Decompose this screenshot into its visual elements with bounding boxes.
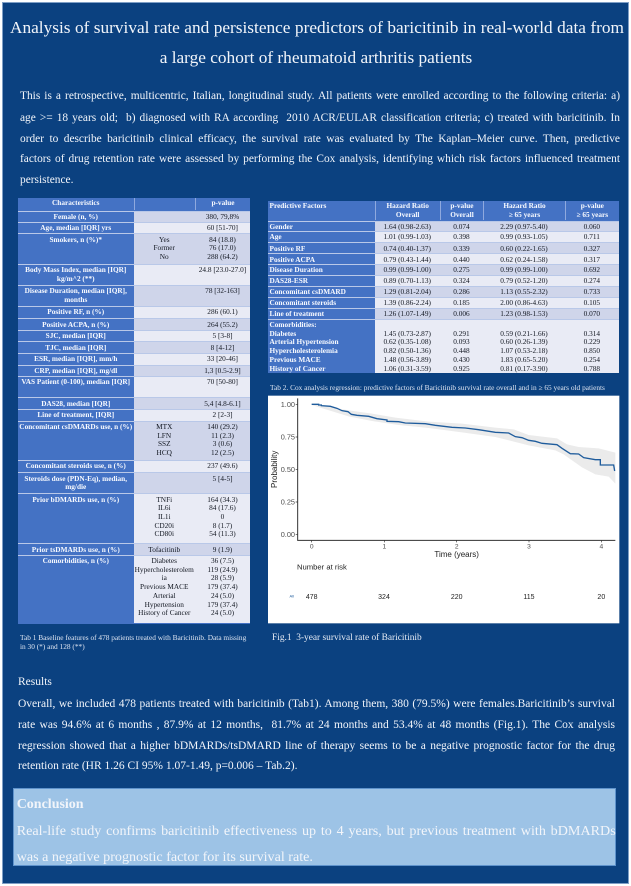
row: comorbidities: Comorbidities, n (%)	[43, 556, 109, 565]
row: line of treatment: Line of treatment	[270, 309, 324, 318]
figure 1 caption: Fig.1 3-year survival rate of Baricitinib	[272, 633, 422, 643]
table 1 header row: Characteristics	[52, 198, 99, 207]
row: disease duration: 0.99 (0.99-1.00)	[500, 265, 548, 274]
row: TJC: 8 [4-12]	[211, 343, 234, 352]
row: line of treatment: 1.26 (1.07-1.49)	[383, 309, 431, 318]
row: age: 60 [51-70]	[207, 223, 238, 232]
row: line of treatment: 1.23 (0.98-1.53)	[500, 309, 548, 318]
row: SJC: 5 [3-8]	[212, 331, 233, 340]
row: comorbidities: 0.59 (0.21-1.66)	[500, 329, 548, 338]
row: positive ACPA: 0.79 (0.43-1.44)	[383, 255, 431, 264]
x axis labels: 1	[382, 544, 386, 551]
row: concomitant steroids: 0.185	[453, 298, 470, 307]
row: comorbidities: 0.60 (0.26-1.39)	[500, 337, 548, 346]
row: line of treatment: 2 [2-3]	[212, 410, 233, 419]
table 2 header row: Hazard Ratio	[386, 201, 429, 210]
row: prior bDMARDs: IL6i	[158, 503, 171, 512]
table 1 header row: p-value	[211, 198, 235, 207]
survival curve	[312, 404, 615, 471]
row: positive ACPA	[18, 318, 250, 330]
axes	[296, 398, 615, 542]
table 2 header row	[268, 201, 619, 220]
row: positive RF: 0.74 (0.40-1.37)	[383, 244, 431, 253]
row: comorbidities: 24 (5.0)	[211, 608, 234, 617]
row: prior bDMARDs: CD20i	[155, 521, 174, 530]
row: concomitant csDMARD: Concomitant csDMARD	[270, 287, 346, 296]
survival chart	[268, 396, 620, 624]
conclusion text: Real-life study confirms baricitinib effectiveness up to 4 years, but previous treatment with bDMARDs	[17, 823, 616, 839]
row: CRP	[18, 365, 250, 376]
table 1 header row	[18, 198, 250, 210]
confidence band	[312, 404, 615, 484]
number at risk row: 20	[597, 594, 605, 601]
intro text block: factors of drug retention rate were assessed by performing the Cox analysis, identifying which risk factors influenced treatment	[20, 153, 620, 165]
row: prior tsDMARDs: 9 (1.9)	[213, 545, 232, 554]
row: comorbidities: 0.850	[584, 346, 600, 355]
row: DAS28-ESR: 0.274	[584, 276, 600, 285]
row: concomitant csDMARDs: 140 (29.2)	[207, 422, 238, 431]
row: concomitant steroids: 237 (49.6)	[207, 461, 238, 470]
row: disease duration	[18, 285, 250, 306]
row: positive RF	[268, 242, 619, 253]
x axis labels	[310, 544, 603, 551]
row: line of treatment: Line of treatment, [IQR]	[37, 410, 114, 419]
row: smokers: 84 (18.8)	[209, 235, 236, 244]
row: prior bDMARDs: 0	[221, 512, 224, 521]
row: SJC	[18, 330, 250, 341]
table 2 header row: ≥ 65 years	[509, 210, 540, 219]
row: gender: 0.074	[453, 222, 470, 231]
row: positive ACPA: Positive ACPA	[270, 255, 315, 264]
conclusion heading: Conclusion	[17, 797, 84, 812]
row: steroids dose: 5 [4-5]	[212, 474, 233, 483]
row: comorbidities: Previous MACE	[140, 582, 188, 591]
row: smokers: Former	[154, 243, 175, 252]
table 2: Cox analysis	[268, 201, 619, 373]
row: comorbidities: Hypercholesterolemia	[270, 346, 338, 355]
row: line of treatment	[268, 308, 619, 319]
row: comorbidities: 0.291	[453, 329, 470, 338]
row: body mass index: Body Mass Index, median [IQR]	[25, 265, 126, 274]
row: prior bDMARDs: IL1i	[158, 512, 171, 521]
row: comorbidities: 0.254	[584, 355, 600, 364]
table 1 caption	[20, 633, 246, 651]
row: VAS patient: 70 [50-80]	[207, 377, 238, 386]
row: prior bDMARDs: 164 (34.3)	[207, 495, 238, 504]
row: comorbidities: 179 (37.4)	[207, 600, 238, 608]
row: prior tsDMARDs	[18, 543, 250, 555]
intro text block: age >= 18 years old; b) diagnosed with RA according 2010 ACR/EULAR classification criteria; c) treated with baricitinib. In	[20, 112, 620, 124]
row: comorbidities: 36 (7.5)	[211, 556, 234, 565]
row: disease duration: 0.275	[453, 265, 470, 274]
row: smokers: Yes	[159, 235, 170, 244]
row: concomitant steroids: Concomitant steroids	[270, 298, 336, 307]
row: gender: 2.29 (0.97-5.40)	[500, 222, 548, 231]
row: DAS28: DAS28, median [IQR]	[41, 399, 110, 408]
row: age	[18, 222, 250, 233]
row: age: 0.398	[453, 232, 470, 241]
table 2 header row: Hazard Ratio	[503, 201, 546, 210]
number at risk heading: Number at risk	[297, 563, 347, 572]
row: ESR	[18, 353, 250, 365]
row: concomitant csDMARDs: 12 (2.5)	[211, 448, 234, 457]
row: smokers: 288 (64.2)	[207, 252, 238, 261]
table 1: baseline characteristics	[18, 198, 250, 624]
row: age: 0.711	[584, 232, 600, 241]
table 2 header row: p-value	[450, 201, 474, 210]
row: concomitant csDMARD: 1.29 (0.81-2.04)	[383, 287, 431, 296]
row: concomitant steroids: 1.39 (0.86-2.24)	[383, 298, 431, 307]
row: comorbidities: 0.448	[453, 346, 470, 355]
row: disease duration: 0.692	[584, 265, 600, 274]
row: concomitant csDMARD	[268, 286, 619, 297]
row: comorbidities: 24 (5.0)	[211, 591, 234, 600]
row: CRP: 1,3 [0.5-2.9]	[204, 366, 241, 375]
row: positive RF: Positive RF	[270, 244, 305, 253]
row: comorbidities	[268, 319, 619, 373]
results text	[18, 698, 615, 772]
row: DAS28	[18, 397, 250, 409]
row: concomitant csDMARDs: HCQ	[157, 448, 172, 457]
results text: regression showed that a higher bDMARDs/tsDMARD line of therapy seems to be a negative prognostic factor for the drug	[18, 740, 615, 752]
results text: Overall, we included 478 patients treated with baricitinib (Tab1). Among them, 380 (79.5%) were females.Baricitinib’s survival	[18, 698, 615, 710]
row: comorbidities: 119 (24.9)	[207, 565, 238, 574]
row: prior bDMARDs: CD80i	[155, 529, 174, 538]
chart panel background	[268, 396, 619, 623]
number at risk row: 220	[451, 594, 463, 601]
row: DAS28: 5,4 [4.8-6.1]	[204, 399, 241, 408]
row: comorbidities: 179 (37.4)	[207, 582, 238, 591]
row: prior bDMARDs: 54 (11.3)	[209, 529, 236, 538]
intro text block	[20, 90, 620, 186]
row: positive RF: 0.339	[453, 244, 470, 253]
row: disease duration: Disease Duration	[270, 265, 323, 274]
y axis labels: 1.00	[281, 400, 295, 409]
conclusion text	[16, 823, 616, 865]
table 2 header row: Overall	[396, 210, 419, 219]
y axis labels: 0.00	[281, 530, 295, 539]
number at risk row: All	[289, 593, 294, 598]
y axis labels: 0.25	[281, 498, 295, 507]
row: comorbidities: Hypertension	[145, 600, 184, 608]
row: VAS patient	[18, 376, 250, 397]
row: line of treatment: 0.070	[584, 309, 600, 318]
row: prior bDMARDs: TNFi	[156, 495, 172, 504]
row: body mass index	[18, 264, 250, 285]
row: prior bDMARDs	[18, 493, 250, 543]
row: positive ACPA: 0.62 (0.24-1.58)	[500, 255, 548, 264]
row: comorbidities: 0.093	[453, 337, 470, 346]
row: disease duration	[268, 264, 619, 275]
intro text block: This is a retrospective, multicentric, Italian, longitudinal study. All patients were enrolled according to the following criteria: a)	[20, 90, 620, 102]
row: line of treatment	[18, 409, 250, 421]
results text: rate was 94.6% at 6 months , 87.9% at 12 months, 81.7% at 24 months and 53.4% at 48 months (Fig.1). The Cox analysis	[18, 719, 615, 731]
row: VAS patient: VAS Patient (0-100), median [IQR]	[21, 377, 130, 386]
row: concomitant csDMARD: 0.286	[453, 287, 470, 296]
row: comorbidities: 0.430	[453, 355, 470, 364]
row: comorbidities: 1.06 (0.31-3.59)	[383, 364, 431, 372]
title	[10, 18, 624, 67]
row: comorbidities: ia	[162, 573, 167, 582]
row: TJC: TJC, median [IQR]	[45, 343, 106, 352]
row: comorbidities: 1.48 (0.56-3.89)	[383, 355, 431, 364]
row: ESR: ESR, median [IQR], mm/h	[34, 354, 117, 363]
row: comorbidities	[18, 555, 250, 623]
intro text block: persistence.	[20, 174, 73, 186]
row: comorbidities: Diabetes	[270, 329, 296, 338]
row: comorbidities: Previous MACE	[270, 355, 321, 364]
row: female	[18, 211, 250, 222]
row: positive RF: 0.60 (0.22-1.65)	[500, 244, 548, 253]
results heading: Results	[18, 676, 52, 688]
row: comorbidities: 0.62 (0.35-1.08)	[383, 337, 431, 346]
y axis labels: 0.50	[281, 465, 295, 474]
row: positive RF: 286 (60.1)	[207, 307, 238, 316]
row: comorbidities: 28 (5.9)	[211, 573, 234, 582]
row: smokers: No	[160, 252, 169, 261]
row: prior bDMARDs: 84 (17.6)	[209, 503, 236, 512]
x axis labels: 2	[455, 544, 459, 551]
row: female: Female (n, %)	[54, 212, 98, 221]
row: prior tsDMARDs: Prior tsDMARDs use, n (%)	[32, 545, 120, 554]
row: concomitant csDMARDs	[18, 421, 250, 460]
title: a large cohort of rheumatoid arthritis patients	[160, 48, 472, 67]
results section	[18, 676, 615, 772]
row: concomitant csDMARDs: MTX	[156, 422, 172, 431]
row: disease duration: Disease Duration, median [IQR],	[25, 286, 127, 295]
row: concomitant csDMARD: 0.733	[584, 287, 600, 296]
conclusion text: was a negative prognostic factor for its survival rate.	[17, 849, 313, 865]
row: disease duration: 0.99 (0.99-1.00)	[383, 265, 431, 274]
number at risk row	[289, 593, 605, 601]
row: CRP: CRP, median [IQR], mg/dl	[34, 366, 117, 375]
row: age	[268, 231, 619, 242]
y axis labels: 0.75	[281, 433, 295, 442]
intro text block: order to describe baricitinib clinical efficacy, the survival rate was evaluated by The Kaplan–Meier curve. Then, predictive	[20, 133, 620, 145]
row: comorbidities: Diabetes	[151, 556, 177, 565]
row: comorbidities: 0.925	[453, 364, 470, 372]
title: Analysis of survival rate and persistence predictors of baricitinib in real-world data from	[10, 18, 624, 37]
row: DAS28-ESR: 0.79 (0.52-1.20)	[500, 276, 548, 285]
row: age: 1.01 (0.99-1.03)	[383, 232, 431, 241]
results text: retention rate (HR 1.26 CI 95% 1.07-1.49, p=0.006 – Tab.2).	[18, 760, 298, 772]
row: comorbidities: 0.788	[584, 364, 600, 372]
conclusion panel	[13, 788, 616, 866]
row: concomitant csDMARDs: 3 (0.6)	[213, 439, 232, 448]
row: TJC	[18, 341, 250, 353]
row: gender: 1.64 (0.98-2.63)	[383, 222, 431, 231]
number at risk row: 115	[523, 594, 535, 601]
row: concomitant csDMARDs: 11 (2.3)	[211, 431, 234, 440]
row: comorbidities: History of Cancer	[270, 364, 325, 372]
row: positive ACPA: 0.317	[584, 255, 600, 264]
row: smokers	[18, 233, 250, 264]
row: concomitant csDMARD: 1.13 (0.55-2.32)	[500, 287, 548, 296]
row: DAS28-ESR: 0.89 (0.70-1.13)	[383, 276, 431, 285]
row: positive ACPA	[268, 253, 619, 264]
row: age: Age	[270, 232, 282, 241]
x axis labels: 4	[599, 544, 603, 551]
row: smokers: 76 (17.0)	[209, 243, 236, 252]
number at risk row: 478	[306, 594, 318, 601]
row: comorbidities: 0.314	[584, 329, 600, 338]
row: concomitant steroids: 2.00 (0.86-4.63)	[500, 298, 548, 307]
row: disease duration: months	[64, 295, 87, 304]
row: concomitant csDMARDs: SSZ	[158, 439, 171, 448]
row: comorbidities: 1.45 (0.73-2.87)	[383, 329, 431, 338]
row: concomitant steroids: 0.105	[584, 298, 600, 307]
row: comorbidities: Arterial	[153, 591, 176, 600]
row: steroids dose: mg/die	[65, 482, 86, 491]
row: comorbidities: 1.07 (0.53-2.18)	[500, 346, 548, 355]
row: DAS28-ESR: 0.324	[453, 276, 470, 285]
row: concomitant csDMARDs: Concomitant csDMARDs use, n (%)	[19, 422, 132, 431]
row: concomitant steroids	[18, 460, 250, 472]
row: body mass index: kg/m^2 (**)	[57, 274, 95, 283]
number at risk row: 324	[378, 594, 390, 601]
row: steroids dose	[18, 472, 250, 493]
table 1 caption: in 30 (*) and 128 (**)	[20, 642, 85, 651]
row: SJC: SJC, median [IQR]	[46, 331, 106, 340]
row: positive ACPA: 264 (55.2)	[207, 320, 238, 329]
row: comorbidities: 0.81 (0.17-3.90)	[500, 364, 548, 372]
table 2 header row: Predictive Factors	[270, 201, 326, 210]
row: comorbidities: 0.229	[584, 337, 600, 346]
x axis labels: 0	[310, 544, 314, 551]
row: comorbidities: History of Cancer	[138, 608, 190, 617]
row: comorbidities: Arterial Hypertension	[270, 337, 339, 346]
row: DAS28-ESR	[268, 275, 619, 286]
row: DAS28-ESR: DAS28-ESR	[270, 276, 308, 285]
y axis title: Probability	[270, 451, 279, 488]
row: concomitant csDMARDs: LFN	[157, 431, 171, 440]
table 2 header row: Overall	[450, 210, 474, 219]
row: concomitant steroids: Concomitant steroids use, n (%)	[26, 461, 126, 470]
row: age: 0.99 (0.93-1.05)	[500, 232, 548, 241]
row: body mass index: 24.8 [23.0-27.0]	[199, 265, 246, 274]
table 2 caption: Tab 2. Cox analysis regression: predictive factors of Baricitinib survival rate overall and in ≥ 65 years old patients	[270, 382, 605, 392]
row: age: Age, median [IQR] yrs	[40, 223, 111, 232]
row: female: 380, 79,8%	[206, 212, 239, 221]
x axis labels: 3	[527, 544, 531, 551]
row: prior bDMARDs: Prior bDMARDs use, n (%)	[32, 495, 119, 504]
row: positive ACPA: 0.440	[453, 255, 470, 264]
row: comorbidities: 0.82 (0.50-1.36)	[383, 346, 431, 355]
row: comorbidities: 1.83 (0.65-5.20)	[500, 355, 548, 364]
row: line of treatment: 0.006	[453, 309, 470, 318]
row: steroids dose: Steroids dose (PDN-Eq), median,	[24, 474, 127, 483]
row: gender	[268, 221, 619, 231]
table 2 header row: p-value	[581, 201, 604, 210]
row: disease duration: 78 [32-163]	[205, 286, 240, 295]
row: ESR: 33 [20-46]	[207, 354, 238, 363]
row: positive RF: Positive RF, n (%)	[47, 307, 104, 316]
table 2 header row: ≥ 65 years	[577, 210, 608, 219]
row: prior bDMARDs: 8 (1.7)	[213, 521, 232, 530]
y axis labels	[281, 400, 295, 539]
row: gender: 0.060	[584, 222, 600, 231]
row: comorbidities: Hypercholesterolem	[135, 565, 194, 574]
table 1 caption: Tab 1 Baseline features of 478 patients treated with Baricitinib. Data missing	[20, 633, 246, 642]
row: smokers: Smokers, n (%)*	[50, 235, 102, 244]
row: gender: Gender	[270, 222, 293, 231]
row: positive ACPA: Positive ACPA, n (%)	[42, 320, 109, 329]
row: concomitant steroids	[268, 297, 619, 308]
row: positive RF: 0.327	[584, 244, 600, 253]
row: prior tsDMARDs: Tofacitinib	[148, 545, 180, 554]
x axis title: Time (years)	[434, 550, 479, 559]
row: comorbidities: Comorbidities:	[270, 320, 317, 329]
row: positive RF	[18, 306, 250, 318]
